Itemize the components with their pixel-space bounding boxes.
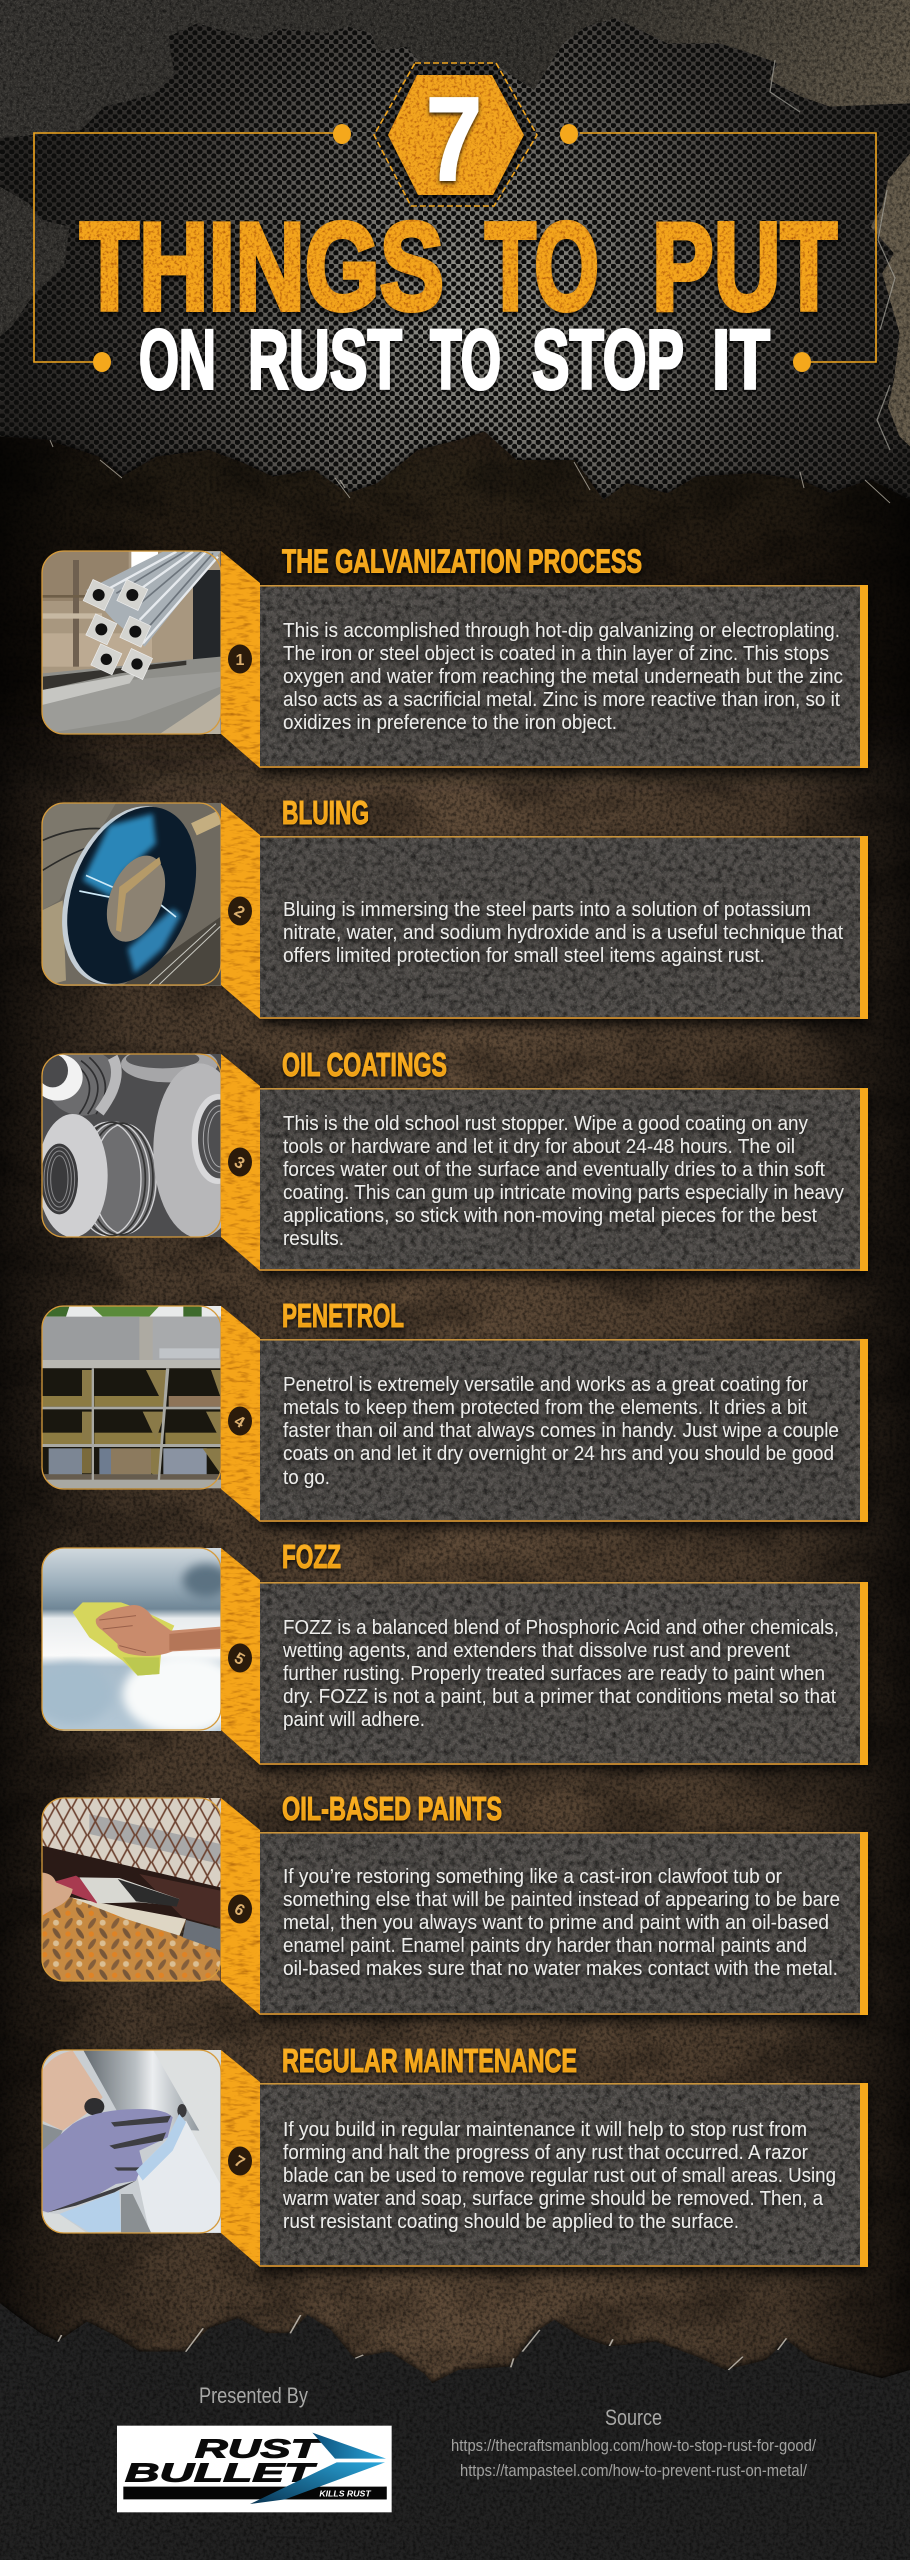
heading: OIL-BASED PAINTS xyxy=(282,1790,502,1827)
presented by label: Presented By xyxy=(199,2383,308,2408)
title line 1: THINGS xyxy=(80,198,444,336)
body text: If you build in regular maintenance it will help to stop rust from xyxy=(283,2119,807,2141)
body text: something else that will be painted instead of appearing to be bare xyxy=(283,1889,840,1911)
title line 2: ON xyxy=(139,312,216,406)
orange flap with number 7 xyxy=(221,2050,261,2268)
body text: coating. This can gum up intricate moving parts especially in heavy xyxy=(283,1182,844,1204)
photo: painting rusty steel with brush xyxy=(39,1794,226,1981)
orange flap with number 1: 1 xyxy=(236,652,245,669)
card 3: oil coatings xyxy=(33,1046,868,1272)
orange flap with number 2 xyxy=(221,803,261,1021)
body text xyxy=(283,620,843,734)
body text: warm water and soap, surface grime should be removed. Then, a xyxy=(282,2188,824,2210)
header frame with dots xyxy=(34,124,876,372)
heading: BLUING xyxy=(282,794,369,831)
body text: blade can be used to remove regular rust out of small areas. Using xyxy=(283,2165,836,2187)
card 7: regular maintenance xyxy=(39,2042,868,2268)
body text xyxy=(282,2119,836,2233)
hexagon badge with number 7 xyxy=(374,63,537,206)
body text: metal, then you always want to prime and paint with an oil-based xyxy=(283,1912,829,1934)
heading: PENETROL xyxy=(282,1297,404,1334)
body text: rust resistant coating should be applied to the surface. xyxy=(283,2211,739,2233)
photo: gloved hand wiping pipe xyxy=(39,2047,226,2234)
body text: results. xyxy=(283,1228,344,1250)
source links xyxy=(451,2436,816,2480)
photo: blue steel coil xyxy=(42,803,221,986)
text panel xyxy=(260,836,868,1019)
orange flap with number 4: 4 xyxy=(231,1413,247,1432)
title line 2: STOP xyxy=(532,312,684,406)
body text: This is accomplished through hot-dip galvanizing or electroplating. xyxy=(283,620,840,642)
body text: oxygen and water from reaching the metal underneath but the zinc xyxy=(283,666,843,688)
body text: forming and halt the progress of any rust that occurred. A razor xyxy=(283,2142,808,2164)
title line 1: TO xyxy=(485,198,599,336)
body text: enamel paint. Enamel paints dry harder than normal paints and xyxy=(283,1935,807,1957)
body text xyxy=(282,1617,839,1731)
text panel xyxy=(260,2083,868,2267)
orange flap with number 5 xyxy=(221,1548,261,1766)
source links: https://thecraftsmanblog.com/how-to-stop-rust-for-good/ xyxy=(451,2436,816,2455)
body text: Bluing is immersing the steel parts into a solution of potassium xyxy=(283,899,811,921)
title line 2: RUST xyxy=(248,312,402,406)
body text: further rusting. Properly treated surfaces are ready to paint when xyxy=(283,1663,825,1685)
heading: REGULAR MAINTENANCE xyxy=(282,2042,577,2079)
body text xyxy=(283,1113,844,1250)
body text: dry. FOZZ is not a paint, but a primer that conditions metal so that xyxy=(283,1686,836,1708)
photo: galvanized poles xyxy=(42,551,221,734)
body text: nitrate, water, and sodium hydroxide and is a useful technique that xyxy=(283,922,843,944)
orange flap with number 4 xyxy=(221,1306,261,1524)
text panel xyxy=(260,1582,868,1765)
body text: FOZZ is a balanced blend of Phosphoric Acid and other chemicals, xyxy=(283,1617,839,1639)
body text: oxidizes in preference to the iron object. xyxy=(283,712,617,734)
orange flap with number 2: 2 xyxy=(231,903,247,922)
body text: wetting agents, and extenders that dissolve rust and prevent xyxy=(282,1640,790,1662)
source label: Source xyxy=(605,2405,662,2430)
body text xyxy=(283,1866,840,1980)
card 5: fozz xyxy=(33,1538,868,1766)
body text: forces water out of the surface and eventually dries to a thin soft xyxy=(283,1159,825,1181)
logo: Rust Bullet: BULLET xyxy=(125,2458,317,2488)
body text: metals to keep them protected from the elements. It dries a bit xyxy=(283,1397,807,1419)
body text: oil-based makes sure that no water makes contact with the metal. xyxy=(283,1958,838,1980)
body text: Penetrol is extremely versatile and works as a great coating for xyxy=(283,1374,808,1396)
body text: also acts as a sacrificial metal. Zinc is more reactive than iron, so it xyxy=(283,689,840,711)
source links: https://tampasteel.com/how-to-prevent-rust-on-metal/ xyxy=(460,2461,807,2480)
orange flap with number 3: 3 xyxy=(231,1154,247,1173)
text panel xyxy=(260,585,868,768)
body text: The iron or steel object is coated in a thin layer of zinc. This stops xyxy=(283,643,829,665)
title line 2 xyxy=(139,312,770,406)
card 6: oil-based paints xyxy=(39,1790,868,2016)
orange flap with number 6 xyxy=(221,1798,261,2016)
orange flap with number 1 xyxy=(221,551,261,769)
logo: Rust Bullet: RUST xyxy=(195,2434,322,2464)
orange flap with number 7: 7 xyxy=(231,2153,247,2172)
heading: FOZZ xyxy=(282,1538,341,1575)
text panel xyxy=(260,1339,868,1522)
title line 2: TO xyxy=(430,312,501,406)
orange flap with number 5: 5 xyxy=(231,1650,247,1669)
orange flap with number 6: 6 xyxy=(231,1901,247,1920)
body text: tools or hardware and let it dry for about 24-48 hours. The oil xyxy=(283,1136,795,1158)
body text: offers limited protection for small steel items against rust. xyxy=(283,945,765,967)
heading: OIL COATINGS xyxy=(282,1046,447,1083)
body text xyxy=(283,1374,839,1489)
orange flap with number 3 xyxy=(221,1054,261,1272)
title line 1 xyxy=(80,198,837,336)
card 2: bluing xyxy=(38,788,868,1021)
body text xyxy=(283,899,843,967)
body text: This is the old school rust stopper. Wipe a good coating on any xyxy=(283,1113,808,1135)
photo: threaded metal fittings xyxy=(42,1054,221,1237)
body text: If you’re restoring something like a cast-iron clawfoot tub or xyxy=(283,1866,782,1888)
logo: Rust Bullet: KILLS RUST xyxy=(319,2490,372,2499)
hexagon badge with number 7: 7 xyxy=(426,73,482,206)
heading: THE GALVANIZATION PROCESS xyxy=(282,542,642,580)
logo: Rust Bullet xyxy=(117,2426,392,2512)
photo: metal storage bins xyxy=(39,1303,226,1488)
text panel xyxy=(260,1088,868,1271)
card 4: penetrol xyxy=(39,1297,868,1524)
body text: paint will adhere. xyxy=(283,1709,425,1731)
body text: coats on and let it dry overnight or 24 hrs and you should be good xyxy=(283,1443,834,1465)
card 1: galvanization xyxy=(42,542,868,769)
body text: to go. xyxy=(283,1467,330,1489)
title line 1: PUT xyxy=(652,198,837,336)
body text: applications, so stick with non-moving metal pieces for the best xyxy=(283,1205,817,1227)
title line 2: IT xyxy=(712,312,770,406)
body text: faster than oil and that always comes in handy. Just wipe a couple xyxy=(283,1420,839,1442)
text panel xyxy=(260,1832,868,2015)
photo: hand wiping metal with yellow cloth xyxy=(42,1548,221,1731)
